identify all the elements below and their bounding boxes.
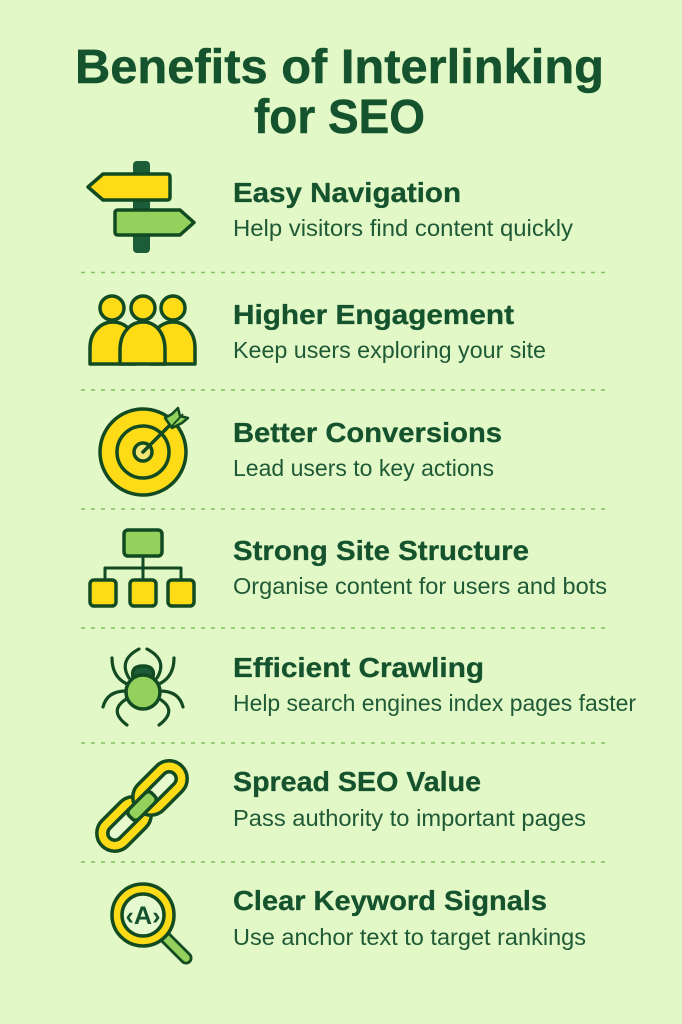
panel: easy navigation bbox=[88, 161, 574, 253]
description: Help search engines index pages faster bbox=[233, 690, 636, 716]
panel: strong site structure bbox=[90, 530, 607, 606]
icon: magnifier: ‹A› bbox=[126, 902, 160, 930]
icon: signpost bbox=[88, 161, 194, 253]
heading: Easy Navigation bbox=[233, 177, 461, 208]
description: Use anchor text to target rankings bbox=[233, 924, 586, 950]
panel: spread SEO value bbox=[89, 753, 586, 859]
icon: group of people bbox=[90, 296, 195, 364]
icon: chain link bbox=[89, 753, 195, 859]
heading: Strong Site Structure bbox=[233, 535, 529, 566]
heading: Efficient Crawling bbox=[233, 652, 484, 683]
title bbox=[75, 41, 604, 144]
heading: Higher Engagement bbox=[233, 299, 514, 330]
heading: Clear Keyword Signals bbox=[233, 885, 547, 916]
description: Organise content for users and bots bbox=[233, 573, 607, 599]
panel: clear keyword signals bbox=[112, 884, 586, 958]
icon: hierarchy bbox=[90, 530, 194, 606]
description: Pass authority to important pages bbox=[233, 805, 586, 831]
icon: target with arrow bbox=[100, 408, 188, 495]
panel: better conversions bbox=[100, 408, 502, 495]
description: Keep users exploring your site bbox=[233, 337, 546, 363]
panel: efficient crawling bbox=[103, 649, 636, 725]
description: Help visitors find content quickly bbox=[233, 215, 574, 241]
panel: higher engagement bbox=[90, 296, 546, 364]
icon: spider bbox=[103, 649, 183, 725]
heading: Spread SEO Value bbox=[233, 766, 481, 797]
heading: Better Conversions bbox=[233, 417, 502, 448]
description: Lead users to key actions bbox=[233, 455, 494, 481]
icon: magnifier bbox=[112, 884, 186, 958]
title: for SEO bbox=[254, 91, 425, 144]
title: Benefits of Interlinking bbox=[75, 41, 604, 94]
